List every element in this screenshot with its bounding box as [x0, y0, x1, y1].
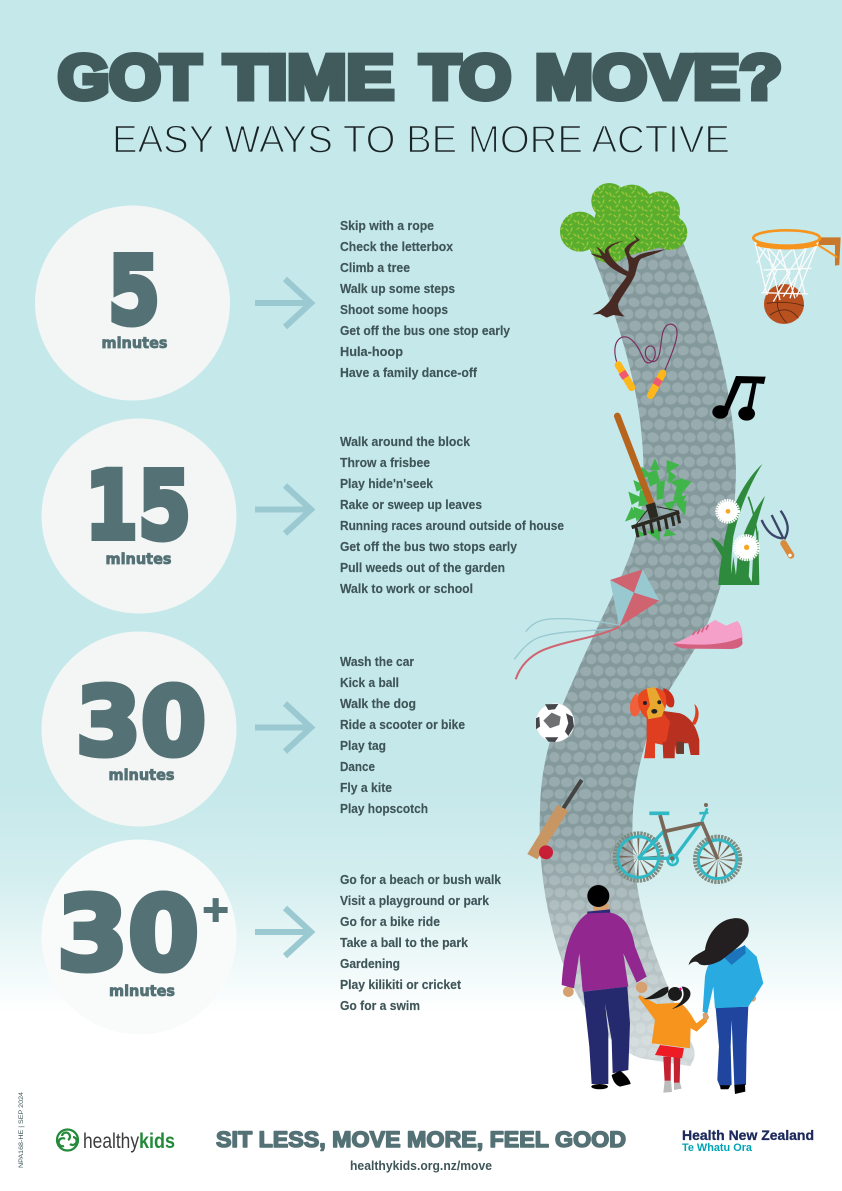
number 5: 5: [108, 237, 160, 346]
circle: [42, 840, 236, 1034]
activity list: Get off the bus two stops early: [340, 539, 518, 554]
icon: tree: [560, 183, 687, 318]
activity list: Kick a ball: [340, 675, 399, 690]
activity list: Hula-hoop: [340, 344, 403, 359]
icon: grass and daisies: [711, 464, 765, 585]
activity list: [340, 218, 511, 380]
icon: koru swirl: [57, 1130, 78, 1150]
unit label: minutes: [106, 550, 172, 568]
icon: music notes: [712, 376, 766, 421]
activity list: [340, 872, 502, 1013]
logo: healthykids: [57, 1130, 175, 1153]
activity list: Dance: [340, 759, 375, 774]
activity list: Go for a bike ride: [340, 914, 440, 929]
illustration: stone path: [530, 240, 736, 1070]
print code: NPA168-HE | SEP 2024: [18, 1092, 25, 1168]
activity list: Rake or sweep up leaves: [340, 497, 482, 512]
circle: [42, 418, 236, 614]
wordmark: kids: [139, 1130, 175, 1153]
number 15: 15: [85, 452, 191, 561]
logo: Health New Zealand: [682, 1127, 814, 1154]
activity list: Go for a beach or bush walk: [340, 872, 502, 887]
activity list: Walk the dog: [340, 696, 416, 711]
panel: 15 minutes: [42, 418, 564, 614]
illustration: family walking: [562, 885, 763, 1094]
icon: hand fork: [762, 511, 792, 557]
activity list: [340, 654, 465, 816]
website: healthykids.org.nz/move: [350, 1158, 492, 1173]
title: MOVE?: [535, 43, 782, 113]
circle: [42, 632, 236, 826]
unit label: minutes: [109, 982, 175, 1000]
icon: rake and weeds: [617, 416, 692, 542]
activity list: Go for a swim: [340, 998, 420, 1013]
icon: skipping rope: [615, 324, 677, 395]
panel: 30 minutes: [42, 632, 465, 826]
number 30: 30: [57, 875, 199, 994]
activity list: Climb a tree: [340, 260, 410, 275]
activity list: Gardening: [340, 956, 400, 971]
logo: Health New Zealand: Health New Zealand: [682, 1127, 814, 1143]
arrow: [255, 908, 311, 956]
unit label: minutes: [108, 766, 175, 784]
activity list: Shoot some hoops: [340, 302, 448, 317]
title: TO: [420, 43, 511, 113]
logo: Health New Zealand: Te Whatu Ora: [682, 1142, 753, 1154]
activity list: Play hide'n'seek: [340, 476, 434, 491]
activity list: Wash the car: [340, 654, 414, 669]
unit label: minutes: [102, 334, 168, 352]
title: GOT: [58, 43, 201, 113]
activity list: Walk to work or school: [340, 581, 473, 596]
activity list: Take a ball to the park: [340, 935, 469, 950]
activity list: Visit a playground or park: [340, 893, 490, 908]
slogan: SIT LESS, MOVE MORE, FEEL GOOD: [216, 1127, 626, 1152]
title: TIME: [224, 43, 394, 113]
activity list: Fly a kite: [340, 780, 392, 795]
activity list: Have a family dance-off: [340, 365, 478, 380]
panel: 30+ minutes: [42, 840, 502, 1034]
arrow: [255, 279, 311, 327]
circle: [35, 206, 230, 400]
activity list: Pull weeds out of the garden: [340, 560, 505, 575]
figure: woman: [689, 918, 763, 1094]
arrow: [255, 704, 311, 752]
icon: basketball hoop: [753, 230, 841, 324]
icon: dog: [630, 687, 699, 758]
arrow: [255, 486, 311, 534]
activity list: Walk up some steps: [340, 281, 455, 296]
activity list: Play kilikiti or cricket: [340, 977, 462, 992]
icon: soccer ball: [536, 703, 574, 742]
activity list: [340, 434, 564, 596]
activity list: Throw a frisbee: [340, 455, 430, 470]
icon: kite: [514, 569, 659, 679]
figure: child: [638, 987, 709, 1093]
activity list: Check the letterbox: [340, 239, 454, 254]
activity list: Running races around outside of house: [340, 518, 564, 533]
number 30: 30: [76, 668, 206, 777]
activity list: Play tag: [340, 738, 386, 753]
icon: pink shoe: [673, 620, 743, 649]
activity list: Play hopscotch: [340, 801, 428, 816]
figure: man: [562, 885, 647, 1089]
activity list: Skip with a rope: [340, 218, 434, 233]
icon: bicycle: [615, 803, 740, 882]
activity list: Ride a scooter or bike: [340, 717, 465, 732]
wordmark: healthy: [83, 1130, 139, 1153]
icon: cricket bat and ball: [527, 780, 582, 859]
activity list: Get off the bus one stop early: [340, 323, 511, 338]
plus sign: +: [201, 890, 230, 930]
subtitle: EASY WAYS TO BE MORE ACTIVE: [112, 119, 730, 162]
panel: 5 minutes: [35, 206, 511, 400]
activity list: Walk around the block: [340, 434, 471, 449]
